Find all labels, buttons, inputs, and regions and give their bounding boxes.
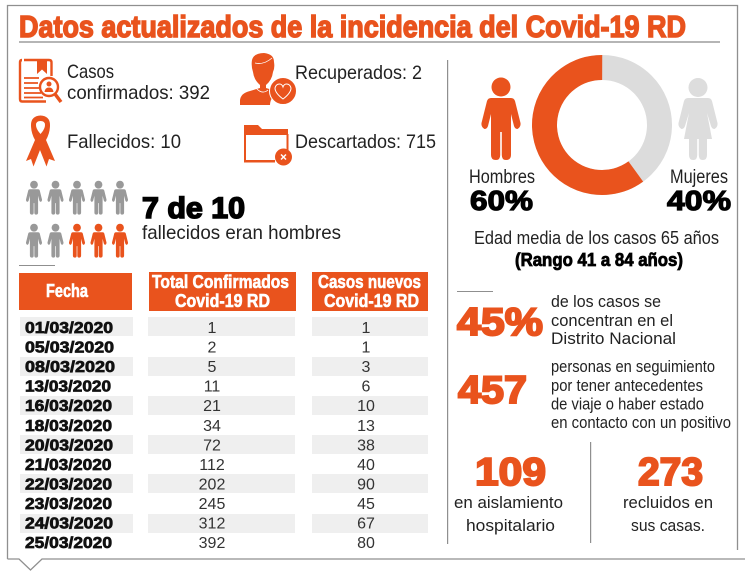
column: casos nuevos: 38 [357,438,375,454]
icon: people 7 of 10 [26,181,128,258]
stat: 45%: Distrito Nacional [551,329,676,348]
table header: Covid-19 RD [175,291,270,311]
icon: case file [20,60,61,102]
panel: key figures [20,53,436,166]
title underline [19,41,720,43]
stat: 45%: concentran en el [551,311,673,330]
column: fecha: 22/03/2020 [25,476,112,494]
stat: 273: recluidos en [623,493,713,512]
stat: 45% [457,292,676,348]
column: casos nuevos: 67 [357,516,375,532]
column: fecha: 18/03/2020 [25,418,112,435]
callout: 7 de 10 [142,192,341,244]
label: casos confirmados [67,61,210,104]
stat: 273 [623,451,713,535]
column: fecha: 25/03/2020 [25,535,112,552]
table [19,272,428,552]
column: casos nuevos: 3 [362,359,371,376]
column: total confirmados: 245 [199,496,225,513]
stat: 109: en aislamiento [454,493,563,512]
label: casos confirmados: confirmados: 392 [67,82,210,104]
label: casos confirmados: Casos [67,61,114,83]
icon: woman [678,78,718,160]
column: casos nuevos: 13 [357,418,375,435]
label: descartados: Descartados: 715 [295,131,436,153]
label: fallecidos: Fallecidos: 10 [67,131,181,153]
column: fecha: 24/03/2020 [25,516,113,532]
text: edad media: (Rango 41 a 84 años) [515,250,683,270]
column: casos nuevos: 90 [357,476,375,494]
stat: 457: 457 [458,369,527,412]
column: fecha: 08/03/2020 [25,359,115,376]
column: total confirmados: 2 [208,340,217,356]
column: casos nuevos: 40 [357,457,375,474]
text: edad media [474,228,719,270]
table header: Casos nuevos [318,272,421,292]
column: fecha: 01/03/2020 [25,320,113,337]
icon: ribbon [26,116,55,166]
column: fecha: 21/03/2020 [25,457,112,474]
column: fecha: 05/03/2020 [25,340,114,356]
column: total confirmados: 202 [199,476,225,494]
icon: folder [244,125,292,166]
column: casos nuevos: 10 [357,398,375,415]
column: total confirmados: 1 [208,320,217,337]
label: mujeres: 40% [667,185,731,216]
label: recuperados: Recuperados: 2 [295,62,422,84]
icon: recovered person [240,53,296,105]
stat: 457: de viaje o haber estado [551,394,704,414]
column: fecha: 13/03/2020 [25,378,111,396]
stat: 273: sus casas. [631,516,705,535]
stat: 45%: de los casos se [551,292,661,311]
stat: 109: hospitalario [466,516,555,535]
column: casos nuevos: 45 [357,496,375,513]
label: hombres: Hombres [469,166,535,188]
text: edad media: Edad media de los casos 65 años [474,228,719,248]
label: hombres [469,166,535,216]
table header: Covid-19 RD [324,291,419,311]
column: total confirmados: 112 [199,457,225,474]
column: total confirmados: 21 [203,398,221,415]
column: casos nuevos: 1 [362,320,371,337]
donut chart [522,45,682,205]
column: total confirmados: 11 [204,378,220,396]
label: mujeres: Mujeres [670,166,728,188]
icon: man [481,78,521,160]
callout: 7 de 10: 7 de 10 [142,192,245,225]
column: total confirmados: 72 [203,438,221,454]
column: fecha: 23/03/2020 [25,496,112,513]
label: hombres: 60% [470,185,533,216]
column: casos nuevos: 80 [357,535,375,552]
column: total confirmados: 392 [199,535,225,552]
stat: 457 [458,357,731,432]
stat: 45%: 45% [457,301,543,344]
column: casos nuevos: 1 [362,340,371,356]
stat: 109 [454,451,563,535]
column: fecha: 16/03/2020 [25,398,112,415]
stat: 457: por tener antecedentes [551,376,703,395]
panel divider [447,60,448,544]
table header: Total Confirmados [152,272,289,292]
table header: Fecha [46,281,89,301]
column: casos nuevos: 6 [362,378,371,396]
panel: sex distribution [469,45,731,270]
callout: 7 de 10: fallecidos eran hombres [142,222,341,244]
stat: 109: 109 [475,451,546,494]
column: total confirmados: 34 [203,418,221,435]
label: mujeres [667,166,731,216]
stat: 457: personas en seguimiento [551,357,715,376]
column: fecha [25,320,115,552]
column: total confirmados: 5 [208,359,217,376]
stat: 273: 273 [638,451,703,494]
column: total confirmados: 312 [199,516,225,532]
column: total confirmados [199,320,225,552]
column: fecha: 20/03/2020 [25,438,113,454]
column: casos nuevos [357,320,375,552]
table header [19,272,428,311]
